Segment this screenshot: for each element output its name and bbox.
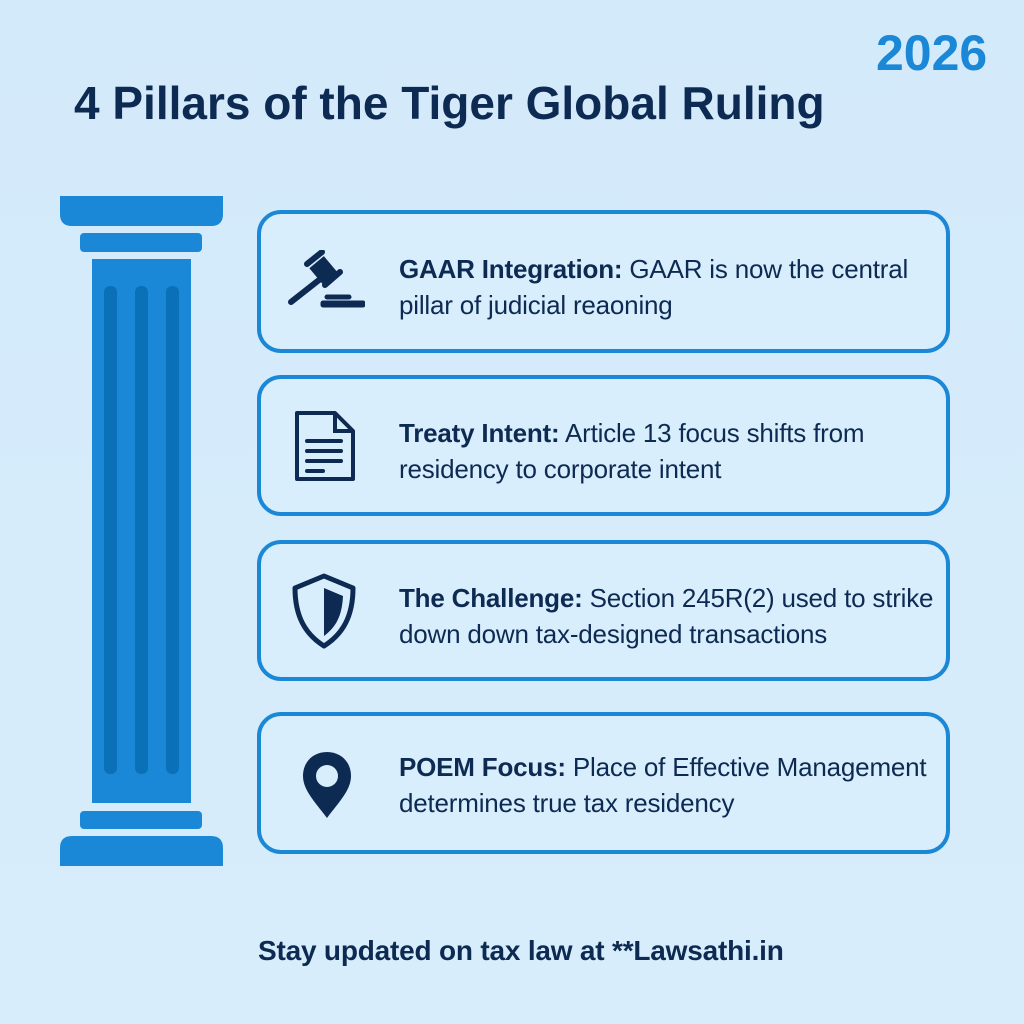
panel: treaty intent xyxy=(257,375,950,516)
text: POEM: POEM Focus: Place of Effective Management xyxy=(399,752,926,782)
text: POEM xyxy=(399,752,926,818)
text: treaty xyxy=(399,418,864,484)
text: GAAR: pillar of judicial reaoning xyxy=(399,290,673,320)
panel: GAAR integration xyxy=(257,210,950,353)
icon: gavel xyxy=(288,250,365,308)
text: challenge: The Challenge: Section 245R(2) used to strike xyxy=(399,583,933,613)
icon: location pin xyxy=(303,752,351,818)
title: 4 Pillars of the Tiger Global Ruling xyxy=(74,77,825,129)
icon: shield xyxy=(292,574,356,648)
year badge: 2026 xyxy=(876,25,987,81)
text: treaty: Treaty Intent: Article 13 focus shifts from xyxy=(399,418,864,448)
icon: document xyxy=(295,411,355,481)
text: GAAR: GAAR Integration: GAAR is now the central xyxy=(399,254,908,284)
panel: the challenge xyxy=(257,540,950,681)
text: challenge: down down tax-designed transactions xyxy=(399,619,827,649)
text: treaty: residency to corporate intent xyxy=(399,454,721,484)
text: GAAR xyxy=(399,254,908,320)
pillar graphic xyxy=(60,196,223,866)
footer: Stay updated on tax law at **Lawsathi.in xyxy=(258,935,784,966)
text: POEM: determines true tax residency xyxy=(399,788,734,818)
text: challenge xyxy=(399,583,933,649)
panel: POEM focus xyxy=(257,712,950,854)
